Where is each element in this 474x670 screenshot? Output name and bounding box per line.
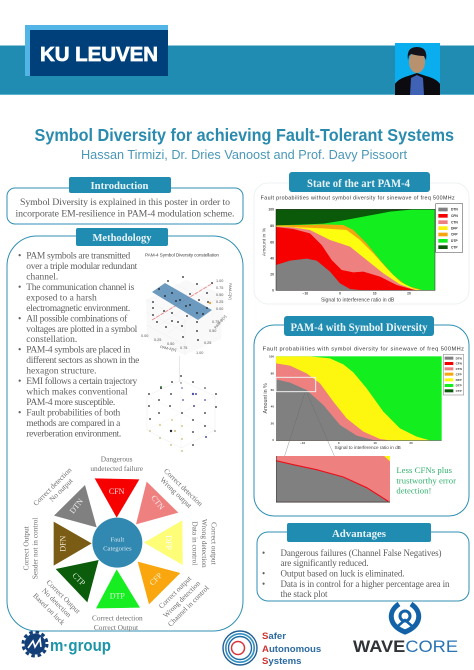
fault categories diagram [22,454,219,632]
triangle: CTN: CTN [149,493,166,512]
3D symbol constellation plot: PAM-B[V] [214,315,227,330]
stack plot: with symbol diversity: 0 [338,441,340,445]
KU Leuven logo: KU LEUVEN [40,44,158,66]
triangle: CTP [56,560,99,602]
triangle: CFN: CFN [109,487,125,496]
logo: safer autonomous systems: Safer [262,631,286,642]
fault descriptions: Correct Output [45,578,82,615]
fault descriptions [22,454,219,632]
KU Leuven logo [25,25,168,76]
logo: m-group [23,632,111,656]
logo: safer autonomous systems [223,631,324,667]
advantages bullet list: • [262,568,265,578]
methodology bullet list: EMI follows a certain trajectory [26,376,138,387]
stack plot: without symbol diversity: 80 [270,224,274,228]
fault descriptions: Sender not in control [31,517,40,579]
stack plot: with symbol diversity: 0 [272,438,274,442]
stack plot: with symbol diversity: Signal to interference ratio in dB [335,445,401,450]
fault descriptions: Correct output [157,574,193,610]
state of the art heading [289,172,430,192]
symbol diversity heading: PAM-4 with Symbol Diversity [290,322,428,334]
methodology bullet list [18,252,139,439]
logo: m-group: m·group [50,637,111,655]
3D symbol constellation plot: 0.25 [216,300,223,304]
panel: introduction [7,177,243,224]
stack plot: with symbol diversity: 80 [271,371,274,375]
introduction heading [69,177,171,193]
logo: safer autonomous systems: Systems [262,656,301,667]
methodology bullet list: reverberation environment. [26,429,121,439]
legend: CFP [456,372,462,376]
green callout: trustworthy error [396,475,456,485]
stack plot: without symbol diversity: 100 [268,208,274,212]
methodology bullet list: methods are compared in a [26,419,121,429]
methodology bullet list: different sectors as shown in the [26,355,139,366]
3D symbol constellation plot: 1.00 [216,279,223,283]
panel: methodology [7,228,243,632]
authors: Hassan Tirmizi, Dr. Dries Vanoost and Prof. Davy Pissoort [81,148,408,162]
green callout: Less CFNs plus [396,465,453,475]
3D symbol constellation plot: PAM-A[V] [160,345,177,352]
methodology bullet list: over a triple modular redundant [26,262,138,272]
panel: advantages [257,523,469,601]
triangle: DTP [96,569,140,608]
3D symbol constellation plot: 0.75 [212,320,219,324]
3D symbol constellation plot: PAM-C[V] [228,283,232,300]
3D symbol constellation plot: 0.75 [180,346,187,350]
3D symbol constellation plot: 0.50 [216,293,223,297]
stack plot: without symbol diversity: Signal to interference ratio in dB [321,297,395,303]
fault descriptions: undetected failure [90,464,143,473]
legend: CTN [451,220,458,224]
legend: DTN [456,356,462,360]
inset zoom plot [276,456,390,502]
fault descriptions: Based on luck [31,591,67,627]
advantages bullet list: • [262,579,265,589]
legend: CTN [456,367,462,371]
fault descriptions: No detection [40,586,73,619]
3D symbol constellation plot: 0.75 [216,286,223,290]
methodology heading [76,228,168,246]
methodology bullet list: exposed to a harsh [26,293,97,303]
panel: state of the art PAM-4 [254,172,469,304]
legend: DFP [456,378,462,382]
fault descriptions: Data in control [190,521,199,565]
legend: DTN [451,208,458,212]
stack plot: with symbol diversity: 60 [271,388,274,392]
stack plot: without symbol diversity: 0 [339,292,341,296]
legend: CFN [456,362,462,366]
advantages heading [287,523,431,542]
stack plot: without symbol diversity: Amount in % [262,227,268,256]
methodology bullet list: Fault probabilities of both [26,408,121,418]
methodology bullet list: • [18,252,21,262]
centre circle: fault categories: Categories [103,545,132,552]
methodology heading: Methodology [92,232,152,244]
legend: DTP [451,239,458,243]
fault descriptions: Wrong output [158,475,194,510]
fault descriptions: Dangerous [101,454,133,463]
advantages bullet list: are significantly reduced. [280,558,368,568]
stack plot: without symbol diversity: Fault probabilities without symbol diversity for sinewave of freq 500MHz [261,196,455,202]
symbol diversity heading [284,316,434,336]
fault descriptions: Correct detection [162,466,205,508]
legend: CFN [451,214,458,218]
state of the art heading: State of the art PAM-4 [307,176,410,190]
fault descriptions: Correct detection [31,465,74,508]
advantages bullet list: • [262,548,265,558]
methodology bullet list: The communication channel is [26,283,135,293]
methodology bullet list: PAM-4 symbols are placed in [26,346,131,356]
methodology bullet list: All possible combinations of [26,313,128,324]
legend: DTP [456,384,462,388]
fault descriptions: Correct detection [92,614,143,623]
methodology bullet list: which makes conventional [26,388,128,398]
stack plot: with symbol diversity [263,347,464,502]
stack plot: without symbol diversity: 60 [270,240,274,244]
stack plot: with symbol diversity: Amount in % [263,383,269,413]
methodology bullet list: • [18,377,21,387]
fault descriptions: No output [47,476,75,504]
fault descriptions: Correct Output [22,526,31,570]
logo: safer autonomous systems: Autonomous [262,644,321,655]
stack plot: with symbol diversity: 100 [269,354,274,358]
hexagon symbol map [147,375,217,452]
triangle: DFN: DFN [59,535,68,552]
fault descriptions: Correct output [210,522,219,565]
title: Symbol Diversity for achieving Fault-Tolerant Systems [34,125,454,145]
legend: CFP [451,233,458,237]
methodology bullet list: channel. [26,272,58,282]
logo: wavecore: WAVE CORE [353,638,458,656]
methodology bullet list: constellation. [26,335,77,345]
introduction text: incorporate EM-resilience in PAM-4 modulation scheme. [16,208,234,220]
methodology bullet list: • [18,314,21,324]
3D symbol constellation plot: 0.00 [216,307,223,311]
header band [0,46,474,95]
advantages bullet list [262,548,450,599]
3D symbol constellation plot: 0.50 [167,342,174,346]
stack plot: without symbol diversity [261,196,463,303]
triangle: CTP: CTP [70,571,88,588]
methodology bullet list: • [18,346,21,356]
centre circle: fault categories [92,518,142,568]
advantages bullet list: Output based on luck is eliminated. [280,568,404,578]
legend: CTP [451,245,458,249]
3D symbol constellation plot: PAM-4 Symbol Diversity constellation [145,252,219,258]
stack plot: with symbol diversity: 10 [373,441,377,445]
fault descriptions: Wrong detection [161,579,202,620]
methodology bullet list: PAM-4 more susceptible. [26,398,115,408]
3D symbol constellation plot: 0.00 [141,334,148,338]
triangle: DFN [54,522,92,566]
advantages bullet list: Dangerous failures (Channel False Negatives) [280,548,442,558]
stack plot: without symbol diversity: 20 [270,273,274,277]
legend [436,204,463,252]
triangle: CTN [136,482,178,524]
stack plot: without symbol diversity: 0 [272,289,274,293]
stack plot: without symbol diversity: 10 [373,292,377,296]
fault descriptions: Correct Output [94,623,138,632]
stack plot: without symbol diversity: 20 [407,292,411,296]
centre circle: fault categories: Fault [110,537,124,544]
triangle: DTN [54,485,97,527]
3D symbol constellation plot [141,252,232,382]
logo: wavecore [353,604,458,656]
methodology bullet list: voltages are plotted in a symbol [26,325,138,335]
3D symbol constellation plot: 1.00 [196,351,203,355]
fault descriptions: Channel in control [166,583,211,628]
triangle: CFP [138,562,180,604]
stack plot: with symbol diversity: 20 [271,421,274,425]
zoom lines [283,392,343,477]
stack plot: with symbol diversity: −10 [300,441,306,445]
3D symbol constellation plot: 0.25 [204,341,211,345]
triangle: DTP: DTP [110,591,125,600]
triangle: CFN [95,478,139,518]
methodology bullet list: • [18,408,21,418]
introduction heading: Introduction [90,180,148,192]
methodology bullet list: • [18,283,21,293]
stack plot: with symbol diversity: Fault probabilities with symbol diversity for sinewave of freq 500MHz [263,347,464,353]
advantages heading: Advantages [332,528,387,540]
fault descriptions: Wrong detection [200,519,209,568]
triangle: DFP: DFP [164,535,173,551]
stack plot: without symbol diversity: −10 [303,292,308,296]
legend [443,354,464,395]
methodology bullet list: electromagnetic environment. [26,304,130,314]
3D symbol constellation plot: 0.25 [154,338,161,342]
3D symbol constellation plot: 0.50 [209,329,216,333]
author photo [395,43,440,95]
introduction text: Symbol Diversity is explained in this poster in order to [20,197,230,208]
triangle: DTN: DTN [68,497,85,515]
legend: CTP [456,389,462,393]
stack plot: with symbol diversity: 20 [409,441,413,445]
advantages bullet list: Data is in control for a higher percentage area in [280,579,450,589]
stack plot: with symbol diversity: 40 [271,405,274,409]
methodology bullet list: hexagon structure. [26,367,96,377]
stack plot: without symbol diversity: 40 [270,256,274,260]
triangle: DFP [144,520,183,565]
green callout: detection! [396,486,431,496]
triangle: CFP: CFP [148,571,164,587]
methodology bullet list: PAM symbols are transmitted [26,252,131,262]
advantages bullet list: the stack plot [280,589,328,599]
panel: PAM-4 with symbol diversity [254,316,469,516]
legend: DFP [451,226,458,230]
